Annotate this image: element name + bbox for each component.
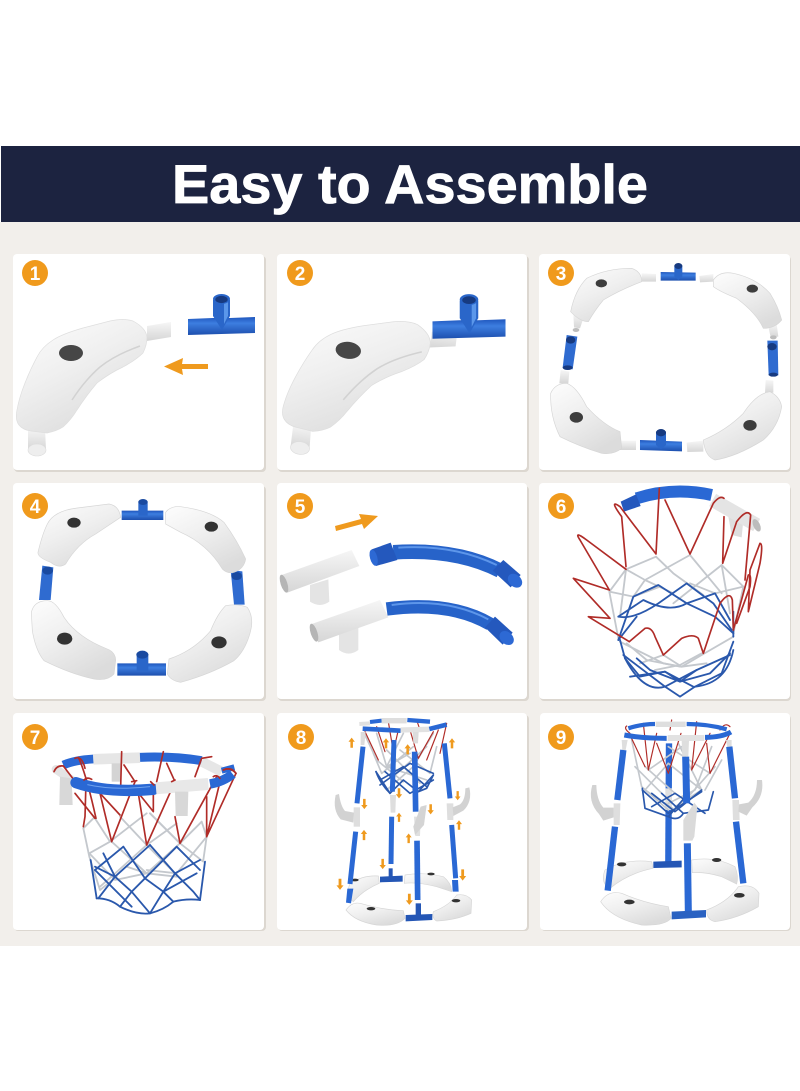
- base: floats: [346, 868, 472, 925]
- badge: step 3: [548, 260, 574, 286]
- hoop rim: [359, 720, 447, 745]
- panel: step 1: [13, 254, 266, 472]
- badge: step 1: [22, 260, 48, 286]
- back poles and base: [601, 743, 759, 925]
- badge: step 2: 2: [295, 264, 305, 285]
- badge: step 6: [548, 493, 574, 519]
- assembled base ring: [31, 499, 252, 682]
- panel: step 4: [13, 483, 266, 701]
- panel: step 5: [277, 483, 529, 701]
- badge: step 7: [22, 724, 48, 750]
- blue arc: upper: [368, 543, 525, 590]
- badge: step 6: 6: [556, 497, 566, 518]
- badge: step 3: 3: [556, 264, 566, 285]
- handles and white joints: [335, 787, 470, 836]
- exploded stand assembly: [335, 720, 472, 925]
- float base piece: [16, 320, 171, 456]
- page background: [0, 222, 800, 946]
- badge: step 5: 5: [295, 497, 306, 518]
- panel: step 7: [13, 713, 266, 931]
- title banner: [1, 146, 800, 222]
- badge: step 9: [548, 724, 574, 750]
- panel: step 6: [539, 483, 791, 701]
- badge: step 1: 1: [30, 264, 41, 285]
- hoop net: [365, 720, 447, 793]
- float base piece: [277, 308, 458, 472]
- badge: step 2: [287, 260, 313, 286]
- rim tube with white tee: [621, 492, 763, 537]
- completed basketball stand: [591, 720, 762, 925]
- title: Easy to Assemble: [172, 153, 648, 215]
- badge: step 9: 9: [556, 728, 566, 749]
- blue tee connector: [188, 294, 255, 335]
- panel: step 8: [277, 713, 529, 931]
- assembly arrows: [336, 738, 466, 905]
- front poles and handles: [591, 747, 762, 919]
- badge: step 4: 4: [30, 497, 41, 518]
- poles: [350, 740, 456, 900]
- panel: step 3: [539, 254, 791, 472]
- badge: step 7: 7: [30, 728, 40, 749]
- blue arc: lower: [387, 603, 517, 648]
- joined tee connector: [432, 294, 506, 339]
- hoop with net: [54, 752, 236, 914]
- badge: step 5: [287, 493, 313, 519]
- panel: step 2: [277, 254, 529, 472]
- badge: step 4: [22, 493, 48, 519]
- separated base pieces and tees: [551, 263, 782, 460]
- arrow: left: [164, 358, 208, 375]
- white t-joint: lower: [308, 600, 388, 654]
- panel: step 9: [540, 713, 791, 931]
- net: [626, 720, 730, 819]
- white t-joint: upper: [278, 550, 359, 605]
- badge: step 8: [288, 724, 314, 750]
- basketball net and rim: [573, 488, 763, 697]
- rim: [622, 724, 732, 757]
- arrow: right: [335, 514, 378, 531]
- badge: step 8: 8: [296, 728, 306, 749]
- t-joints and blue arcs: [278, 543, 525, 654]
